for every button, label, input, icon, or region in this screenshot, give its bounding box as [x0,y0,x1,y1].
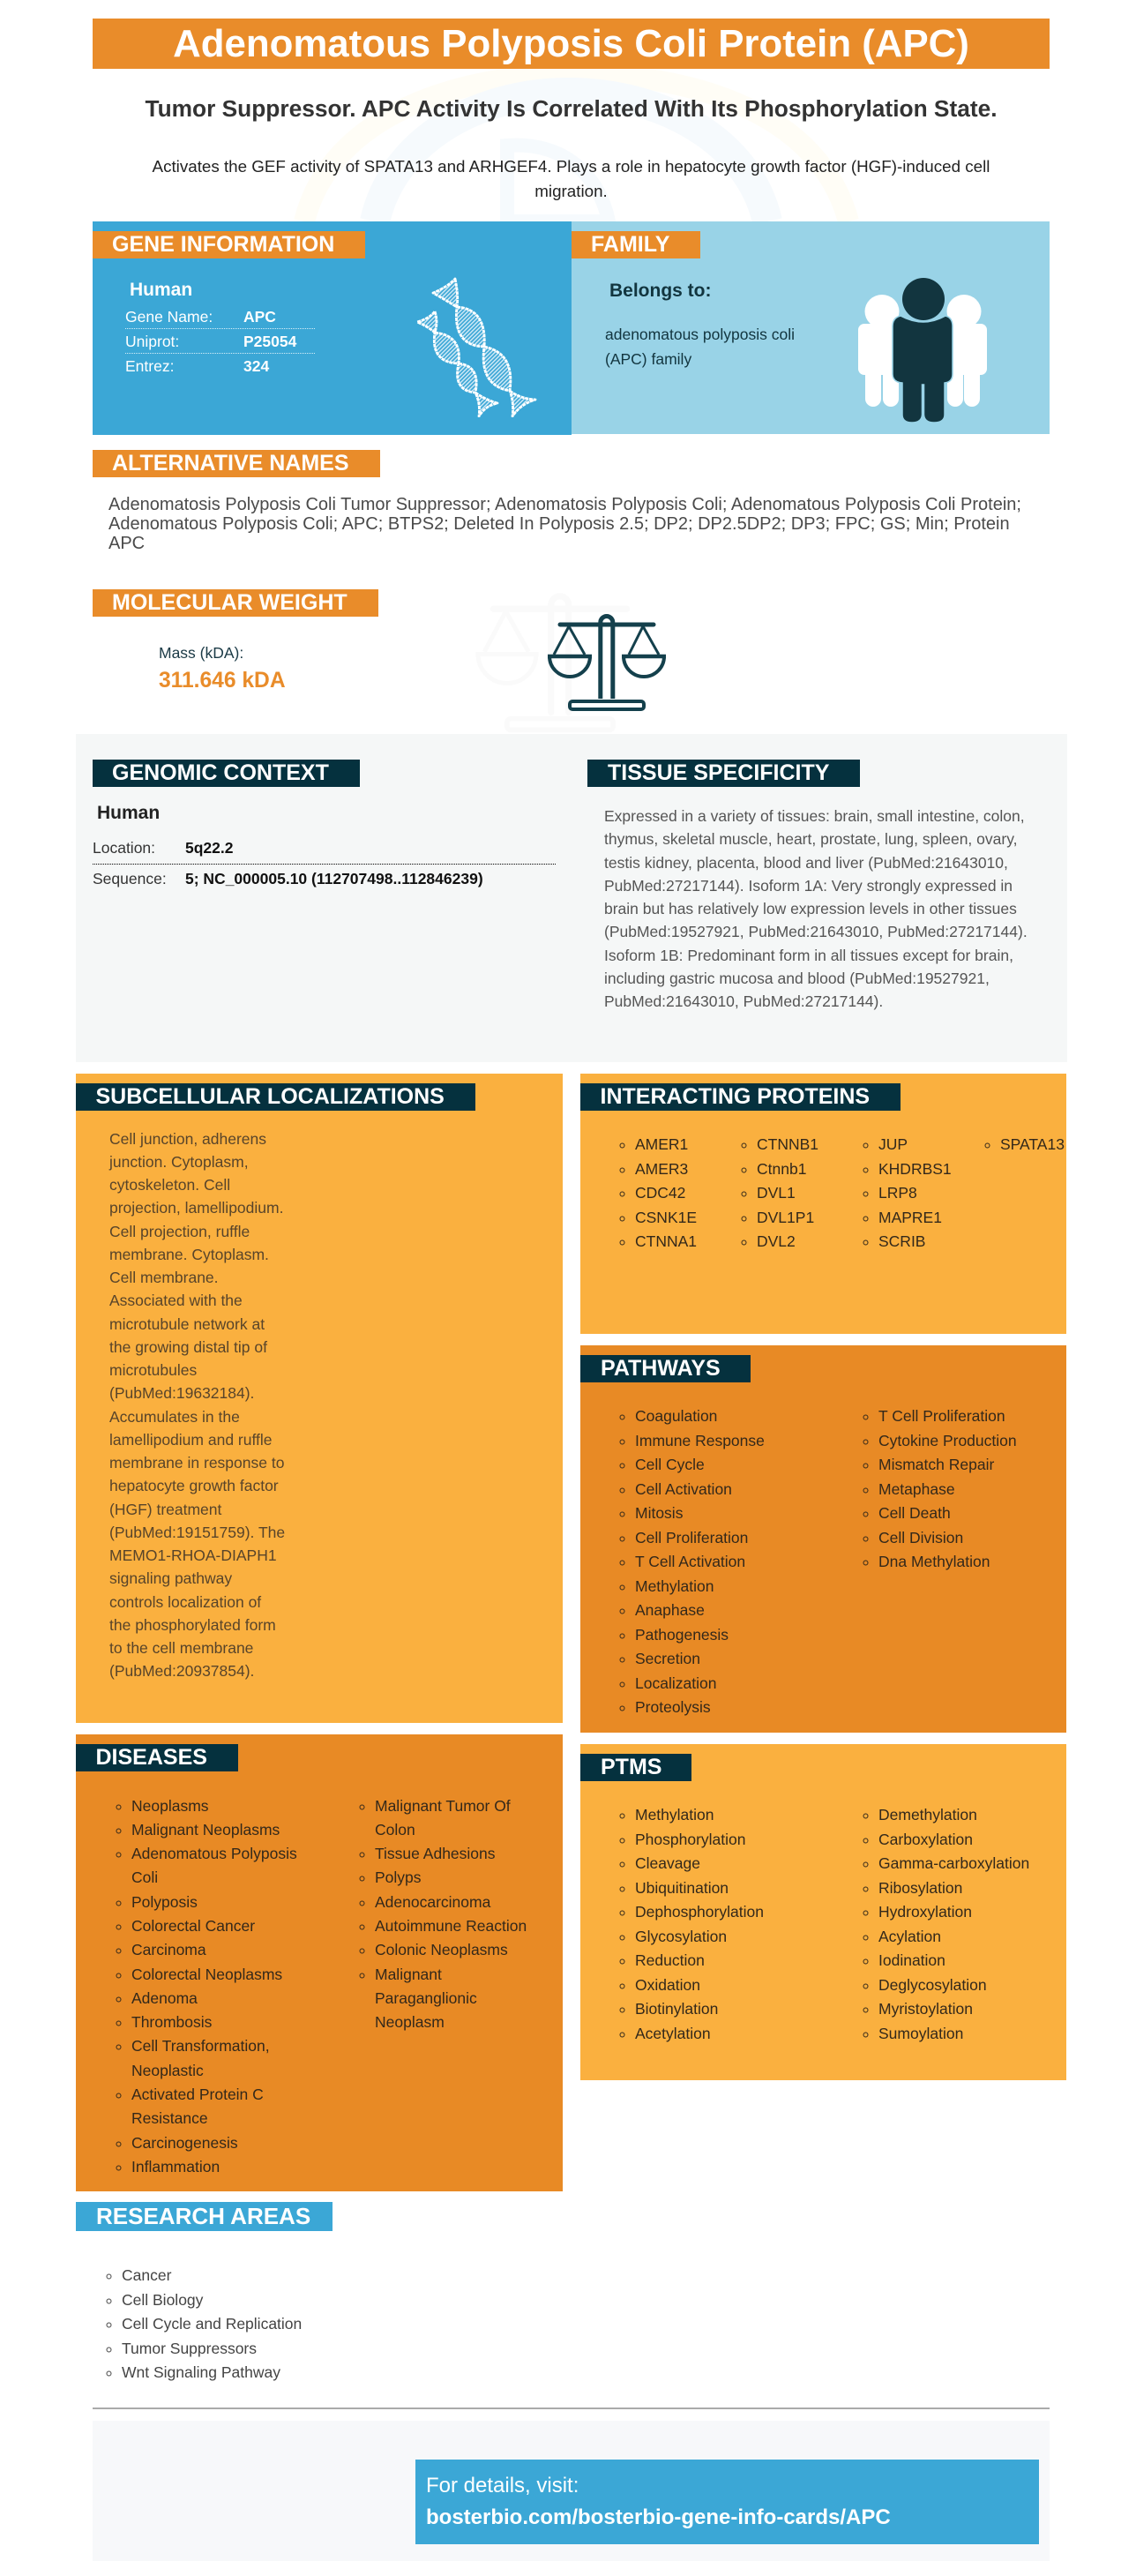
research areas list [106,2266,302,2381]
PTM list column 1: Glycosylation [635,1927,727,1944]
disease list column 1: Neoplastic [131,2062,204,2079]
localization text: hepatocyte growth factor [109,1477,279,1494]
protein list column 2 [741,1135,818,1250]
tissue specificity text: Expressed in a variety of tissues: brain, small intestine, colon, [604,807,1025,825]
PTM list column 2: Gamma-carboxylation [878,1854,1029,1872]
family name: adenomatous polyposis coli [605,326,795,343]
row: gene name: APC [243,308,276,326]
row: uniprot: P25054 [243,333,296,350]
localization text: signaling pathway [109,1569,232,1587]
icon: balance scale watermark [467,587,670,734]
family name: (APC) family [605,350,691,368]
tissue specificity text: testis kidney, placenta, blood and liver (PubMed:21643010, [604,854,1008,872]
research areas list: Cell Cycle and Replication [122,2315,302,2333]
heading: pathways: PATHWAYS [601,1356,721,1381]
protein list column 1: CTNNA1 [635,1232,697,1250]
PTM list column 1 [619,1806,764,2041]
disease list column 1: Carcinogenesis [131,2134,238,2152]
heading: molecular weight: MOLECULAR WEIGHT [112,590,348,615]
heading: subcellular localizations: SUBCELLULAR LOCALIZATIONS [95,1084,445,1109]
disease list column 1: Colorectal Neoplasms [131,1966,282,1983]
disease list column 1 [116,1796,297,2175]
pathway list column 2: Mismatch Repair [878,1456,994,1473]
heading: gene information: GENE INFORMATION [112,232,334,257]
disease list column 2: Neoplasm [375,2013,445,2031]
disease list column 2: Malignant Tumor Of [375,1796,511,1814]
disease list column 1: Adenomatous Polyposis [131,1845,297,1862]
tissue specificity text [604,807,1028,1010]
localization text: controls localization of [109,1593,261,1611]
panel: diseases [76,1734,563,2191]
description [152,157,990,200]
PTM list column 1: Methylation [635,1806,714,1823]
heading: family [572,231,700,258]
protein list column 1 [619,1135,697,1250]
PTM list column 1: Ubiquitination [635,1879,729,1897]
heading: genomic context: GENOMIC CONTEXT [112,760,329,785]
heading: research areas: RESEARCH AREAS [96,2203,310,2229]
PTM list column 2: Acylation [878,1927,941,1944]
pathway list column 1: Methylation [635,1577,714,1595]
gene info table [125,308,315,375]
disease list column 1: Resistance [131,2109,208,2127]
PTM list column 2: Ribosylation [878,1879,962,1897]
research areas list: Tumor Suppressors [122,2340,257,2357]
disease list column 1: Colorectal Cancer [131,1917,255,1935]
protein list column 3: JUP [878,1135,908,1153]
heading: alternative names: ALTERNATIVE NAMES [112,451,349,476]
disease list column 1: Cell Transformation, [131,2037,270,2055]
localization text: membrane in response to [109,1454,284,1471]
localization text: Cell junction, adherens [109,1129,266,1147]
panel: family [572,221,1050,434]
location row: Location: [93,839,155,857]
tissue specificity text: Isoform 1B: Predominant form in all tissues except for brain, [604,946,1013,963]
localization text: projection, lamellipodium. [109,1199,283,1217]
pathway list column 1: Proteolysis [635,1698,711,1716]
icon: balance scale [548,614,666,711]
disease list column 1: Activated Protein C [131,2086,264,2103]
PTM list column 2: Carboxylation [878,1830,973,1847]
localization text: Cell membrane. [109,1269,219,1286]
footer divider [93,2408,1050,2409]
panel: interacting proteins [580,1074,1066,1334]
localization text: Accumulates in the [109,1408,240,1426]
protein list column 2: Ctnnb1 [757,1159,806,1177]
research areas list: Cancer [122,2266,171,2284]
pathway list column 2: Cell Division [878,1528,963,1546]
disease list column 2: Tissue Adhesions [375,1845,496,1862]
disease list column 1: Carcinoma [131,1941,206,1958]
heading: diseases: DISEASES [95,1745,207,1770]
PTM list column 2: Deglycosylation [878,1976,987,1994]
PTM list column 1: Acetylation [635,2024,711,2041]
localization text: Cell projection, ruffle [109,1223,250,1240]
pathway list column 1: Localization [635,1674,716,1692]
pathway list column 2 [863,1407,1017,1570]
belongs to label: Belongs to: [609,281,711,301]
family name [605,326,795,368]
disease list column 2: Malignant [375,1966,442,1983]
PTM list column 2: Hydroxylation [878,1903,972,1921]
panel: genomic context and tissue specificity [76,734,1067,1062]
panel: PTMs [580,1744,1066,2080]
pathway list column 2: Metaphase [878,1480,955,1498]
localization text: to the cell membrane [109,1639,253,1657]
tissue specificity text: including gastric mucosa and blood (PubMed:19527921, [604,970,990,987]
panel: gene information [93,221,572,435]
pathway list column 2: Dna Methylation [878,1553,990,1570]
pathway list column 1: Mitosis [635,1504,683,1522]
alternative names list [108,495,1021,553]
research areas list: Cell Biology [122,2290,203,2308]
protein list column 2: DVL1P1 [757,1209,814,1226]
heading: family: FAMILY [591,232,669,257]
pathway list column 2: Cell Death [878,1504,951,1522]
description: migration. [534,182,608,200]
pathway list column 2: Cytokine Production [878,1431,1017,1449]
disease list column 2: Colonic Neoplasms [375,1941,508,1958]
protein list column 1: AMER1 [635,1135,688,1153]
section: alternative names [93,450,1021,553]
PTM list column 1: Dephosphorylation [635,1903,764,1921]
pathway list column 1: Coagulation [635,1407,717,1425]
localization text: membrane. Cytoplasm. [109,1246,269,1263]
PTM list column 1: Cleavage [635,1854,700,1872]
callout: details link [415,2460,1039,2544]
visit URL: bosterbio.com/bosterbio-gene-info-cards/APC [426,2505,891,2529]
disease list column 1: Thrombosis [131,2013,212,2031]
localization text: the growing distal tip of [109,1338,267,1356]
localization text: junction. Cytoplasm, [109,1153,249,1171]
row: entrez: 324 [243,357,269,375]
disease list column 2: Adenocarcinoma [375,1893,490,1911]
row: gene name: Gene Name: [125,308,213,326]
visit label: For details, visit: [426,2474,579,2497]
localization text: (HGF) treatment [109,1500,221,1517]
sequence row: Sequence: [93,870,167,887]
heading: PTMs: PTMS [601,1755,661,1779]
alternative names list: Adenomatous Polyposis Coli; APC; BTPS2; Deleted In Polyposis 2.5; DP2; DP2.5DP2; DP3; FPC; GS; Min; Protein [108,514,1010,534]
localization text [109,1129,285,1680]
pathway list column 1 [619,1407,765,1716]
protein list column 3: KHDRBS1 [878,1159,952,1177]
PTM list column 2 [863,1806,1029,2041]
disease list column 2 [360,1796,527,2031]
location row: 5q22.2 [185,839,233,857]
alternative names list: APC [108,534,145,553]
icon: DNA double helix [416,277,536,417]
PTM list column 1: Phosphorylation [635,1830,746,1847]
row: gene name [125,304,315,329]
PTM list column 1: Reduction [635,1951,705,1969]
localization text: the phosphorylated form [109,1616,276,1634]
pathway list column 1: T Cell Activation [635,1553,745,1570]
disease list column 2: Paraganglionic [375,1989,477,2007]
disease list column 1: Adenoma [131,1989,198,2007]
mass label: Mass (kDA): [159,644,243,662]
disease list column 1: Malignant Neoplasms [131,1821,280,1838]
disease list column 1: Polyposis [131,1893,198,1911]
protein list column 3: MAPRE1 [878,1209,942,1226]
disease list column 2: Autoimmune Reaction [375,1917,527,1935]
tissue specificity text: PubMed:27217144). Isoform 1A: Very strongly expressed in [604,877,1013,895]
pathway list column 1: Cell Cycle [635,1456,705,1473]
localization text: (PubMed:20937854). [109,1662,254,1680]
PTM list column 2: Sumoylation [878,2024,963,2041]
localization text: cytoskeleton. Cell [109,1176,230,1194]
heading: interacting proteins: INTERACTING PROTEINS [600,1084,870,1109]
protein list column 3: LRP8 [878,1184,917,1202]
mass value: 311.646 kDA [159,669,286,693]
alternative names list: Adenomatosis Polyposis Coli Tumor Suppressor; Adenomatosis Polyposis Coli; Adenomatous Polyposis Coli Protein; [108,495,1021,514]
localization text: microtubule network at [109,1314,265,1332]
background watermark [295,69,859,221]
panel: pathways [580,1345,1066,1733]
protein list column 3: SCRIB [878,1232,925,1250]
panel: subcellular localizations [76,1074,563,1723]
PTM list column 2: Iodination [878,1951,945,1969]
species label: Human [130,280,192,300]
pathway list column 1: Anaphase [635,1601,705,1619]
protein list column 2: CTNNB1 [757,1135,818,1153]
row: uniprot: Uniprot: [125,333,179,350]
localization text: (PubMed:19151759). The [109,1524,285,1541]
localization text: MEMO1-RHOA-DIAPH1 [109,1546,277,1564]
description: Activates the GEF activity of SPATA13 and ARHGEF4. Plays a role in hepatocyte growth factor (HGF)-induced cell [153,157,990,176]
PTM list column 1: Biotinylation [635,2000,718,2018]
pathway list column 2: T Cell Proliferation [878,1407,1005,1425]
section: molecular weight [93,589,378,693]
PTM list column 2: Demethylation [878,1806,977,1823]
protein list column 1: CSNK1E [635,1209,697,1226]
localization text: (PubMed:19632184). [109,1384,254,1402]
heading: diseases [76,1744,238,1771]
title: Adenomatous Polyposis Coli Protein (APC) [173,22,969,65]
protein list column 3 [863,1135,952,1250]
disease list column 1: Inflammation [131,2158,220,2175]
location row [93,839,233,857]
localization text: microtubules [109,1361,197,1379]
PTM list column 1: Oxidation [635,1976,700,1994]
tissue specificity text: (PubMed:19527921, PubMed:21643010, PubMed:27217144). [604,923,1028,940]
row: entrez: Entrez: [125,357,174,375]
tissue specificity text: PubMed:21643010, PubMed:27217144). [604,992,883,1010]
protein list column 2: DVL2 [757,1232,796,1250]
research areas list: Wnt Signaling Pathway [122,2363,280,2381]
tissue specificity text: brain but has relatively low expression levels in other tissues [604,900,1017,917]
localization text: Associated with the [109,1292,243,1309]
protein list column 1: AMER3 [635,1159,688,1177]
sequence row: 5; NC_000005.10 (112707498..112846239) [185,870,483,887]
pathway list column 1: Pathogenesis [635,1625,729,1643]
pathway list column 1: Secretion [635,1650,700,1667]
tissue specificity text: thymus, skeletal muscle, heart, prostate, lung, spleen, ovary, [604,830,1018,848]
dotted separator [93,864,556,865]
pathway list column 1: Cell Proliferation [635,1528,748,1546]
heading: pathways [580,1355,751,1382]
heading: PTMs [580,1754,691,1781]
panel: footer [93,2421,1050,2561]
heading: tissue specificity: TISSUE SPECIFICITY [608,760,829,785]
row: uniprot [125,329,315,354]
pathway list column 1: Immune Response [635,1431,765,1449]
row: entrez [125,357,270,375]
protein list column 1: CDC42 [635,1184,685,1202]
subtitle: Tumor Suppressor. APC Activity Is Correlated With Its Phosphorylation State. [145,95,998,122]
disease list column 2: Polyps [375,1868,422,1886]
disease list column 1: Neoplasms [131,1796,209,1814]
localization text: lamellipodium and ruffle [109,1431,273,1449]
species label: Human [97,803,160,823]
disease list column 1: Coli [131,1868,158,1886]
disease list column 2: Colon [375,1821,415,1838]
PTM list column 2: Myristoylation [878,2000,973,2018]
icon: group of people [858,278,987,422]
pathway list column 1: Cell Activation [635,1480,732,1498]
protein list column 4: SPATA13 [1000,1135,1065,1153]
protein list column 2: DVL1 [757,1184,796,1202]
